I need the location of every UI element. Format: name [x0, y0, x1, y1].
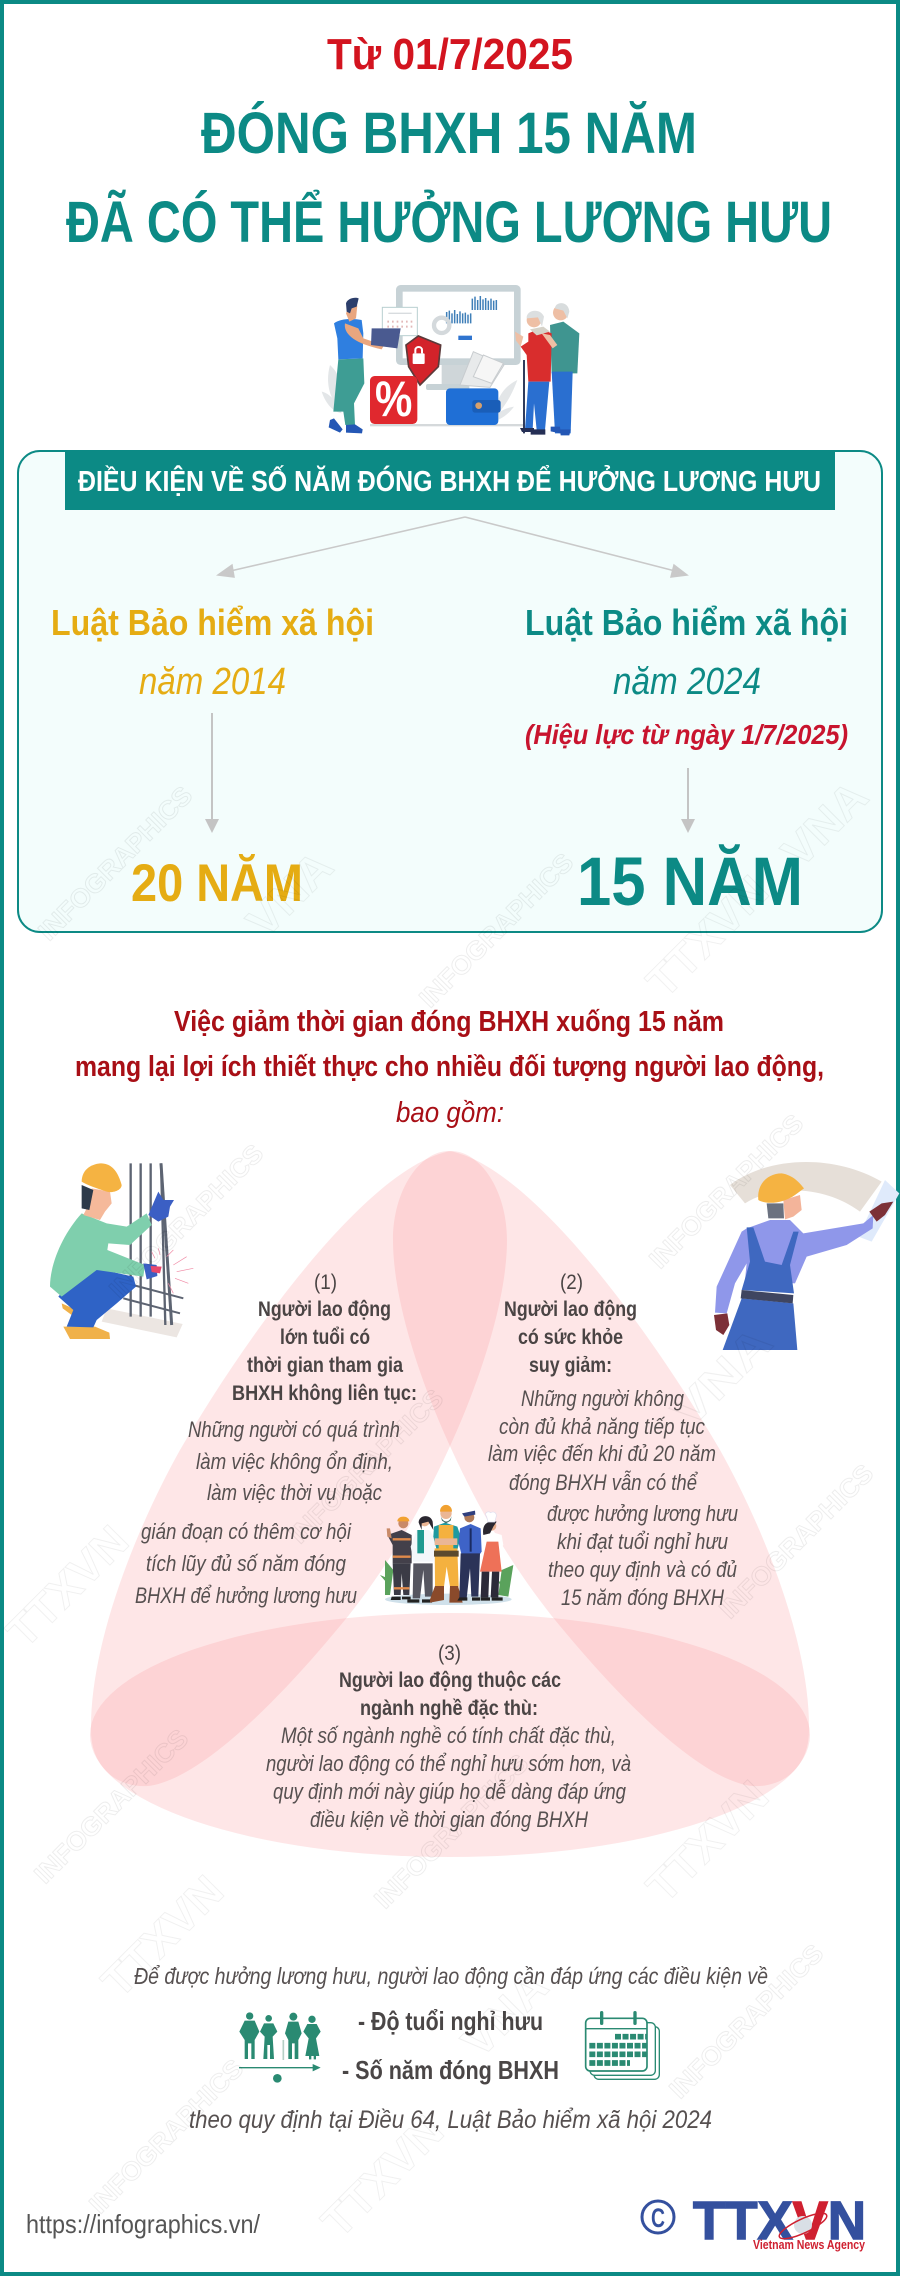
text block 3: [266, 1642, 631, 1832]
icon: rebar worker: [50, 1163, 193, 1339]
left column: 2014 law: Luật Bảo hiểm xã hội: [51, 602, 374, 643]
doctor: [407, 1516, 436, 1603]
logo: TTXVN: Vietnam News Agency: [753, 2237, 866, 2252]
text block 2: còn đủ khả năng tiếp tục: [499, 1414, 705, 1439]
text block 2: khi đạt tuổi nghỉ hưu: [557, 1529, 728, 1554]
text block 2: Người lao động: [504, 1298, 637, 1321]
text block 1: thời gian tham gia: [247, 1354, 403, 1377]
text block 2: suy giảm:: [529, 1354, 612, 1377]
watermarks: INFOGRAPHICS: [83, 2053, 249, 2219]
intro statement: [75, 1006, 824, 1129]
logo: TTXVN: C: [651, 2203, 665, 2233]
text block 3: Người lao động thuộc các: [339, 1669, 561, 1692]
watermarks: TTXVN: [312, 2106, 453, 2247]
text block 1: [135, 1271, 417, 1608]
watermarks: VNA: [237, 842, 343, 947]
date line: Từ 01/7/2025: [327, 30, 573, 79]
text block 2: có sức khỏe: [518, 1326, 623, 1349]
panel heading banner: [65, 450, 835, 510]
watermarks: INFOGRAPHICS: [413, 847, 579, 1013]
text block 1: BHXH để hưởng lương hưu: [135, 1583, 357, 1608]
icon: group of workers: [380, 1505, 513, 1605]
watermarks: VNA: [452, 1962, 558, 2067]
watermarks: INFOGRAPHICS: [713, 1458, 879, 1624]
condition: retirement age: - Độ tuổi nghỉ hưu: [358, 2006, 543, 2036]
text block 2: làm việc đến khi đủ 20 năm: [488, 1441, 716, 1466]
text block 3: ngành nghề đặc thù:: [360, 1697, 538, 1720]
logo: TTXVN: TTXVN: [693, 2191, 866, 2251]
intro statement: bao gồm:: [396, 1097, 504, 1129]
watermarks: TTXVN: [92, 1866, 233, 2007]
illustration: pension and retirees: [322, 285, 579, 435]
text block 1: Những người có quá trình: [188, 1417, 400, 1442]
text block 1: (1): [314, 1271, 337, 1294]
text block 1: gián đoạn có thêm cơ hội: [141, 1519, 352, 1544]
text block 2: 15 năm đóng BHXH: [561, 1585, 724, 1610]
title block: [66, 30, 832, 255]
fireman: [387, 1517, 412, 1600]
watermarks: INFOGRAPHICS: [103, 1138, 269, 1304]
text block 1: Người lao động: [258, 1298, 391, 1321]
text block 2: (2): [560, 1271, 583, 1294]
closing conditions: [134, 1963, 768, 2134]
source url: https://infographics.vn/: [26, 2209, 261, 2239]
text block 2: theo quy định và có đủ: [548, 1557, 737, 1582]
percent symbol: %: [375, 371, 412, 427]
watermarks: [0, 772, 879, 2247]
watermarks: INFOGRAPHICS: [663, 1938, 829, 2104]
text block 1: làm việc thời vụ hoặc: [207, 1480, 382, 1505]
watermarks: INFOGRAPHICS: [283, 1383, 449, 1549]
closing conditions: Để được hưởng lương hưu, người lao động cần đáp ứng các điều kiện về: [134, 1963, 768, 1989]
panel: law comparison: [18, 450, 882, 932]
trefoil diagram: [90, 1151, 810, 1857]
text block 3: điều kiện về thời gian đóng BHXH: [310, 1807, 588, 1832]
watermarks: VNA: [662, 1318, 782, 1437]
text block 3: quy định mới này giúp họ dễ dàng đáp ứng: [273, 1779, 627, 1804]
condition: contribution years: - Số năm đóng BHXH: [342, 2055, 559, 2085]
petal: health decline workers: [393, 1151, 809, 1786]
text block 1: làm việc không ổn định,: [196, 1449, 393, 1474]
watermarks: INFOGRAPHICS: [32, 780, 198, 946]
petal: older workers: [91, 1151, 507, 1786]
police officer: [457, 1511, 482, 1601]
intro statement: Việc giảm thời gian đóng BHXH xuống 15 năm: [174, 1006, 724, 1038]
watermarks: INFOGRAPHICS: [368, 1748, 534, 1914]
right column: 2024 law: Luật Bảo hiểm xã hội: [525, 602, 848, 643]
builder: [430, 1505, 463, 1603]
main title line 1: ĐÓNG BHXH 15 NĂM: [201, 101, 697, 166]
text block 2: [488, 1271, 738, 1610]
left column: 2014 law: 20 NĂM: [131, 853, 303, 913]
text block 3: (3): [438, 1642, 461, 1665]
text block 1: tích lũy đủ số năm đóng: [146, 1551, 347, 1576]
chef woman: [480, 1512, 503, 1601]
text block 1: BHXH không liên tục:: [232, 1382, 417, 1405]
text block 3: người lao động có thể nghỉ hưu sớm hơn, và: [266, 1751, 631, 1776]
watermarks: VNA: [772, 772, 878, 877]
right column: 2024 law: năm 2024: [613, 661, 761, 703]
right column: 2024 law: 15 NĂM: [577, 843, 803, 920]
arrow: split to left: [218, 517, 465, 577]
text block 3: Một số ngành nghề có tính chất đặc thù,: [281, 1723, 616, 1748]
icon: calendar: [586, 2013, 659, 2079]
watermarks: TTXVN: [0, 1516, 138, 1657]
text block 2: được hưởng lương hưu: [547, 1501, 738, 1526]
text block 2: Những người không: [521, 1386, 685, 1411]
text block 2: đóng BHXH vẫn có thể: [509, 1470, 698, 1495]
watermarks: TTXVN: [637, 866, 778, 1007]
right column: 2024 law: (Hiệu lực từ ngày 1/7/2025): [525, 719, 848, 750]
icon: people and time: [239, 2012, 321, 2083]
left column: 2014 law: năm 2014: [139, 661, 286, 703]
arrow: split to right: [465, 517, 687, 577]
closing conditions: theo quy định tại Điều 64, Luật Bảo hiểm xã hội 2024: [189, 2106, 712, 2134]
watermarks: TTXVN: [637, 1771, 778, 1912]
icon: plastering worker: [714, 1162, 899, 1350]
text block 1: lớn tuổi có: [280, 1326, 370, 1349]
watermarks: INFOGRAPHICS: [643, 1108, 809, 1274]
watermarks: INFOGRAPHICS: [28, 1723, 194, 1889]
petal: special occupations: [90, 1613, 810, 1857]
right column: 2024 law: [525, 602, 848, 920]
left column: 2014 law: [51, 602, 374, 913]
